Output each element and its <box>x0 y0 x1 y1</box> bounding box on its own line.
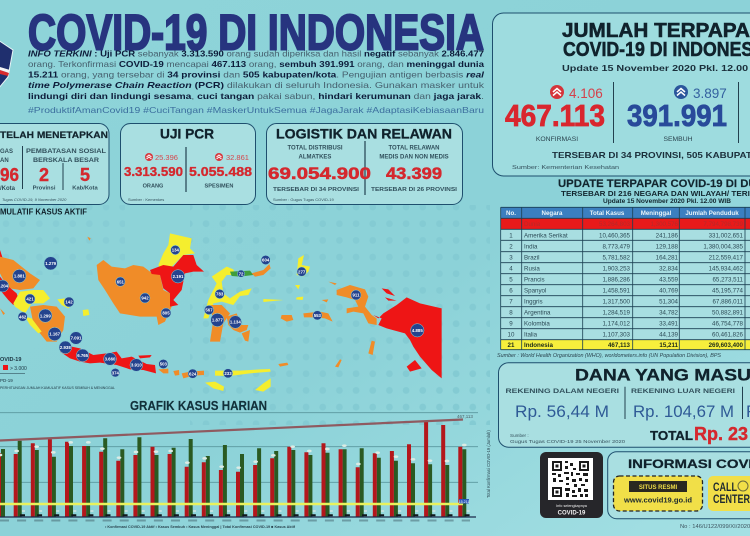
panel: uji pcr <box>120 124 256 204</box>
left column value: 96 <box>0 165 19 185</box>
icon: increase spesimen <box>215 153 223 161</box>
recovered increase: 3.897 <box>693 86 727 101</box>
bubble values: 2.938 <box>60 345 71 350</box>
country rows: 1,886,286 <box>602 276 631 284</box>
bubble values: 1.134 <box>230 320 241 325</box>
source: Sumber : <box>510 433 529 438</box>
left column labels: AN <box>0 158 9 164</box>
world total row: Dunia <box>524 221 541 228</box>
sub headings: TOTAL DISTRIBUSI <box>287 146 343 152</box>
world total row: 7,794,798,739 <box>703 221 744 228</box>
sub headings: TOTAL RELAWAN <box>388 146 440 152</box>
country rows: Inggris <box>524 298 543 306</box>
country rows: Amerika Serikat <box>524 232 568 239</box>
country rows: 45,195,774 <box>712 288 744 294</box>
values: 69.054.900 <box>268 164 371 183</box>
country rows: 212,559,417 <box>709 254 744 262</box>
country rows: 9 <box>509 320 513 328</box>
table header: No. <box>506 210 516 217</box>
call center badge <box>708 476 750 511</box>
country rows: 65,273,511 <box>712 276 744 284</box>
source: Tugas COVID-19, 9 November 2020 <box>2 197 67 202</box>
left column unit: /Kota <box>0 186 16 192</box>
source <box>510 433 626 444</box>
country rows: 44,139 <box>659 332 679 338</box>
table header: Negara <box>542 210 563 217</box>
panel heading <box>562 20 750 61</box>
info text block: 15.211 orang, yang tersebar di 34 provinsi dan 505 kabupaten/kota . Pengujian antigen berbasis real <box>28 70 485 80</box>
world total row: 1,300,576 <box>650 221 679 228</box>
map legend: > 3.000 <box>10 366 27 372</box>
province case bubbles <box>0 245 424 378</box>
country rows: 1 <box>509 232 513 239</box>
panel heading: LOGISTIK DAN RELAWAN <box>276 126 452 142</box>
bubble values: 134 <box>172 248 180 253</box>
country rows: 5 <box>509 276 513 284</box>
country rows: 241,186 <box>656 232 679 239</box>
table header: Jumlah Penduduk <box>685 210 739 217</box>
country rows: 145,934,462 <box>709 266 744 272</box>
country rows: Italia <box>524 332 538 338</box>
source: Sumber : Kemenkes <box>128 197 164 202</box>
sumatra <box>0 237 91 342</box>
reference number: No : 146/U122/099/XI/2020 <box>680 524 750 530</box>
maluku <box>278 255 375 367</box>
panel: logistik dan relawan <box>266 124 462 204</box>
bubble values: 604 <box>262 258 270 263</box>
world total row: 53,264,803 <box>599 221 631 228</box>
psbb values: 5 <box>80 165 90 185</box>
captions: TERSEBAR DI 26 PROVINSI <box>371 187 458 193</box>
sulawesi <box>203 264 283 342</box>
country rows: 1,380,004,385 <box>703 244 744 250</box>
website badge: SITUS RESMI <box>639 485 677 491</box>
panel heading: UJI PCR <box>160 126 214 142</box>
title: COVID-19 DI INDONESIA <box>28 4 484 60</box>
labels: ORANG <box>143 184 163 190</box>
left column labels: GAS <box>0 149 13 155</box>
bubble values: 911 <box>353 293 360 298</box>
icon: increase orang <box>145 153 153 161</box>
psbb values <box>39 165 90 185</box>
country rows: Prancis <box>524 276 545 284</box>
total: Rp. 23 <box>694 424 748 444</box>
table header: Total Kasus <box>590 210 625 217</box>
bubble values: 72 <box>239 271 244 276</box>
bubble values: 624 <box>189 371 197 376</box>
bubble values: 651 <box>117 279 125 284</box>
psbb label <box>26 149 106 164</box>
qr caption <box>556 504 588 516</box>
values: 43.399 <box>386 164 442 183</box>
bubble values: 1.299 <box>40 313 51 318</box>
bubble values: 1.279 <box>45 261 57 266</box>
panel: telah menetapkan <box>0 124 109 204</box>
chart axis title: Total Konfirmasi COVID-19 (Jumlah) <box>486 430 491 498</box>
captions <box>273 187 458 193</box>
table heading <box>558 178 750 205</box>
indonesia row: 269,603,400 <box>709 342 744 349</box>
country rows: 50,882,891 <box>712 310 744 316</box>
country rows: 2 <box>509 244 513 250</box>
country rows: 60,461,826 <box>712 332 744 338</box>
bubble values: 421 <box>26 297 34 302</box>
country rows: 8 <box>509 310 513 316</box>
country rows: 10 <box>508 332 515 338</box>
bubble values: 277 <box>298 269 306 274</box>
bubble values: 783 <box>216 292 224 297</box>
account labels: REKENING LUAR NEGERI <box>631 388 735 395</box>
bubble values: 553 <box>314 313 322 318</box>
country rows: Rusia <box>524 266 540 272</box>
kalimantan <box>97 233 204 325</box>
bubble values: 503 <box>160 362 168 367</box>
qr card <box>540 452 603 518</box>
bubble values: 1.881 <box>14 274 25 279</box>
account values: Rp. 56,44 M <box>515 402 609 421</box>
country rows: 5,781,582 <box>602 254 631 262</box>
bubble values <box>0 248 423 376</box>
sub headings: MEDIS DAN NON MEDIS <box>379 154 449 160</box>
indonesia row: 15,211 <box>659 342 679 349</box>
bubble values: 462 <box>19 314 27 319</box>
values <box>268 164 442 183</box>
country rows: 32,834 <box>659 266 679 272</box>
info text block: lindungi diri dan lindungi sesama , cuci tangan pakai sabun, hindari kerumunan dan jaga jarak . <box>28 91 484 101</box>
bubble values: 374 <box>112 370 120 375</box>
country rows: 7 <box>509 298 513 306</box>
indonesia row: Indonesia <box>524 342 553 349</box>
indonesia row: 21 <box>508 342 515 349</box>
bubble values: 233 <box>224 371 232 376</box>
indonesia row: 467,113 <box>608 342 631 349</box>
panel: dana yang masuk <box>498 363 750 447</box>
country rows: Brazil <box>524 254 539 262</box>
hashtags: #ProduktifAmanCovid19 #CuciTangan #MaskerUntukSemua #JagaJarak #AdaptasiKebiasaanBaru <box>28 105 484 115</box>
indonesia row <box>508 342 744 349</box>
panel: jumlah terpapar <box>492 13 750 176</box>
source: Sumber: Kementerian Kesehatan <box>512 165 619 171</box>
country rows: 164,281 <box>656 254 679 262</box>
left column labels <box>0 149 13 164</box>
psbb label: BERSKALA BESAR <box>33 158 100 164</box>
country rows: 34,782 <box>659 310 679 316</box>
country rows: India <box>524 244 538 250</box>
labels: SPESIMEN <box>205 184 233 190</box>
bubble values: 1.877 <box>212 318 223 323</box>
bubble values: 805 <box>162 311 170 316</box>
bar value tags <box>0 441 467 469</box>
confirmed bars <box>0 421 462 516</box>
icon: confirmed increase <box>550 85 564 99</box>
country rows: 129,188 <box>656 244 679 250</box>
panel heading: DANA YANG MASUK <box>575 366 750 385</box>
country rows: 1,458,591 <box>602 288 631 294</box>
map legend <box>0 357 116 390</box>
values: 3.313.590 <box>124 164 183 179</box>
spread note: TERSEBAR DI 34 PROVINSI, 505 KABUPATEN/KOTA <box>552 151 750 160</box>
account labels <box>506 388 735 395</box>
country rows: 1,174,012 <box>602 320 631 328</box>
total confirmed line <box>0 420 463 440</box>
increase orang: 25.396 <box>155 153 178 162</box>
country rows: 1,317,500 <box>602 298 631 306</box>
bubble values: 7.091 <box>71 336 82 341</box>
map heading: MULATIF KASUS AKTIF <box>0 208 87 216</box>
psbb label: PEMBATASAN SOSIAL <box>26 149 106 155</box>
country rows: 1,284,519 <box>602 310 631 316</box>
qr caption: Info selengkapnya <box>556 504 588 508</box>
psbb units: Provinsi <box>33 186 56 192</box>
confirmed value: 467.113 <box>505 98 605 133</box>
logo shield <box>0 40 13 89</box>
country rows: 1,107,303 <box>602 332 631 338</box>
country rows: 40,769 <box>659 288 679 294</box>
country rows: 10,460,365 <box>599 232 631 239</box>
country rows: 4 <box>509 266 513 272</box>
recovered bars <box>1 437 466 516</box>
bar chart: daily cases <box>0 413 491 529</box>
country rows: 46,754,778 <box>712 320 744 328</box>
country rows: Spanyol <box>524 288 546 294</box>
table header: Meninggal <box>641 210 672 217</box>
country rows: 6 <box>509 288 513 294</box>
country rows: 67,886,011 <box>712 298 744 306</box>
panel heading: TELAH MENETAPKAN <box>0 130 108 141</box>
table heading: Update 15 November 2020 Pkl. 12.00 WIB <box>603 199 732 205</box>
account values: Rp. 104,67 M <box>633 402 734 421</box>
papua <box>337 285 442 378</box>
info text block <box>28 48 485 101</box>
map legend: OVID-19 <box>0 357 21 363</box>
psbb values: 2 <box>39 165 49 185</box>
total: TOTAL <box>650 428 693 443</box>
java and lesser sunda <box>60 347 271 392</box>
icon: recovered increase <box>674 85 688 99</box>
map legend: PD-19 <box>0 378 13 383</box>
bubble values: 142 <box>65 300 73 305</box>
captions: TERSEBAR DI 34 PROVINSI <box>273 187 360 193</box>
total label: 467,113 <box>457 414 473 419</box>
update date: Update 15 November 2020 Pkl. 12.00 WIB <box>562 63 750 73</box>
country rows: Argentina <box>524 310 551 316</box>
table source: Sumber : World Health Organization (WHO), worldometers.info (UN Population Division), BPS <box>497 353 722 359</box>
country rows: 51,304 <box>659 298 679 306</box>
increase spesimen: 32.861 <box>226 153 249 162</box>
account values <box>515 402 750 421</box>
map legend: PERHITUNGAN JUMLAH KUMULATIF KASUS SEMBUH & MENINGGAL <box>0 385 116 390</box>
info text block: INFO TERKINI : Uji PCR sebanyak 3.313.590 orang sudah diperiksa dan hasil negatif sebanyak 2.846.477 <box>28 48 484 58</box>
table heading: TERSEBAR DI 216 NEGARA DAN WILAYAH/ TERITORI <box>561 191 750 198</box>
panel: informasi covid-19 <box>608 452 750 519</box>
country rows: 3 <box>509 254 513 262</box>
labels <box>143 184 233 190</box>
qr caption: COVID-19 <box>558 510 586 516</box>
website badge: www.covid19.go.id <box>623 496 692 504</box>
chart heading: GRAFIK KASUS HARIAN <box>130 399 267 413</box>
confirmed increase: 4.106 <box>569 86 603 101</box>
call center badge: CALL <box>713 482 737 494</box>
country rows: 8,773,479 <box>602 244 631 250</box>
bubble values: 2.191 <box>173 274 184 279</box>
chart legend: • Konfirmasi COVID-19 Aktif • Kasus Sembuh • Kasus Meninggal | Total Konfirmasi COVID-19 ■ Kasus Aktif <box>105 524 296 529</box>
world total row <box>524 221 744 228</box>
source: Gugus Tugas COVID-19 25 November 2020 <box>510 439 626 444</box>
country rows: 43,559 <box>659 276 679 284</box>
bubble values: 3.660 <box>105 357 116 362</box>
bubble values: 3.910 <box>131 363 142 368</box>
country rows: 331,002,651 <box>709 232 744 239</box>
sub headings: ALMATKES <box>299 154 331 160</box>
bubble values: 567 <box>205 308 213 313</box>
deaths label: 15,211 <box>459 500 469 504</box>
bubble values: 4.885 <box>412 328 423 333</box>
account labels: REKENING DALAM NEGERI <box>506 388 619 395</box>
qr code <box>552 461 589 497</box>
map of Indonesia <box>0 233 442 392</box>
values <box>124 164 252 179</box>
country rows: 1,903,253 <box>602 266 631 272</box>
confirmed label: KONFIRMASI <box>536 136 578 143</box>
bubble values: 6.765 <box>77 353 89 358</box>
bubble values: 1.167 <box>49 332 61 337</box>
recovered value: 391.991 <box>627 98 727 133</box>
active cases line <box>0 503 463 505</box>
info text block: time Polymerase Chain Reaction (PCR) dilakukan di seluruh Indonesia. Gunakan masker untuk <box>28 80 485 90</box>
info text block: orang. Terkonfirmasi COVID-19 mencapai 467.113 orang, sembuh 391.991 orang, dan meninggal dunia <box>28 59 484 69</box>
values: 5.055.488 <box>189 164 252 179</box>
world table <box>501 207 750 350</box>
total <box>650 424 748 444</box>
source: Sumber : Gugus Tugas COVID-19 <box>273 197 334 202</box>
country rows <box>508 232 744 338</box>
sub headings <box>287 146 449 160</box>
website badge <box>614 476 702 511</box>
bubble values: 942 <box>141 296 149 301</box>
recovered label: SEMBUH <box>663 136 693 143</box>
psbb units: Kab/Kota <box>72 186 98 192</box>
country rows: 33,491 <box>659 320 679 328</box>
table header <box>506 210 739 217</box>
country rows: Kolombia <box>524 320 550 328</box>
psbb units <box>33 186 98 192</box>
